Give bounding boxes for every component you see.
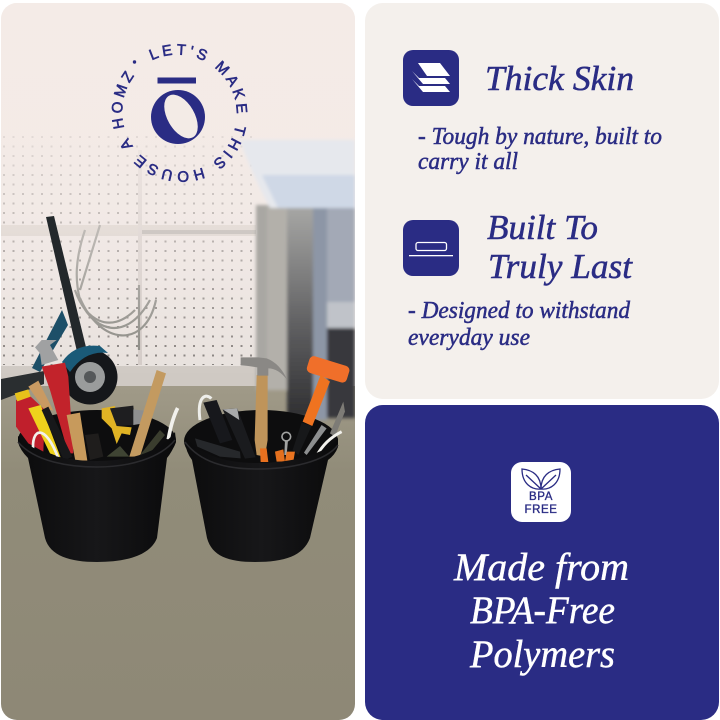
icon: thick wall profile (403, 220, 459, 276)
tools: right bucket (195, 355, 351, 462)
shelving unit (240, 140, 355, 420)
heading: Made from BPA-Free Polymers: Polymers (469, 633, 615, 676)
icon: BPA free leaves: BPA (529, 491, 553, 503)
pegboard wall (1, 130, 256, 388)
separator dot (133, 60, 136, 64)
bucket body (18, 432, 176, 562)
icon: layers (403, 50, 459, 106)
coiled hoses (75, 225, 156, 350)
text: thick skin description: - Tough by nature, built to (418, 124, 662, 150)
scooter (1, 216, 118, 404)
icon: BPA free leaves (511, 462, 571, 522)
logo mark (151, 78, 205, 144)
photo haze (1, 136, 256, 356)
heading: Thick Skin: Thick Skin (485, 59, 634, 98)
text: built to last description: - Designed to withstand (408, 298, 631, 324)
circular slogan: LET'S MAKE THIS HOUSE A HOMZ (112, 44, 248, 182)
icon: BPA free leaves: FREE (524, 504, 558, 516)
floor (1, 386, 355, 720)
text: built to last description: everyday use (408, 325, 530, 351)
panel: garage photo (1, 3, 355, 720)
heading: Built To Truly Last: Truly Last (488, 247, 633, 286)
bucket body (185, 436, 338, 562)
text: thick skin description: carry it all (418, 149, 518, 175)
bucket: right with tools (184, 355, 351, 562)
heading: Built To Truly Last: Built To (487, 208, 598, 247)
brand badge (112, 44, 248, 182)
panel: features (365, 3, 719, 399)
heading: Made from BPA-Free Polymers: Made from (453, 546, 629, 589)
tools: left bucket (15, 340, 178, 461)
panel: BPA free (365, 405, 719, 720)
heading: Made from BPA-Free Polymers: BPA-Free (470, 589, 615, 632)
bucket: left with tools (15, 340, 178, 562)
